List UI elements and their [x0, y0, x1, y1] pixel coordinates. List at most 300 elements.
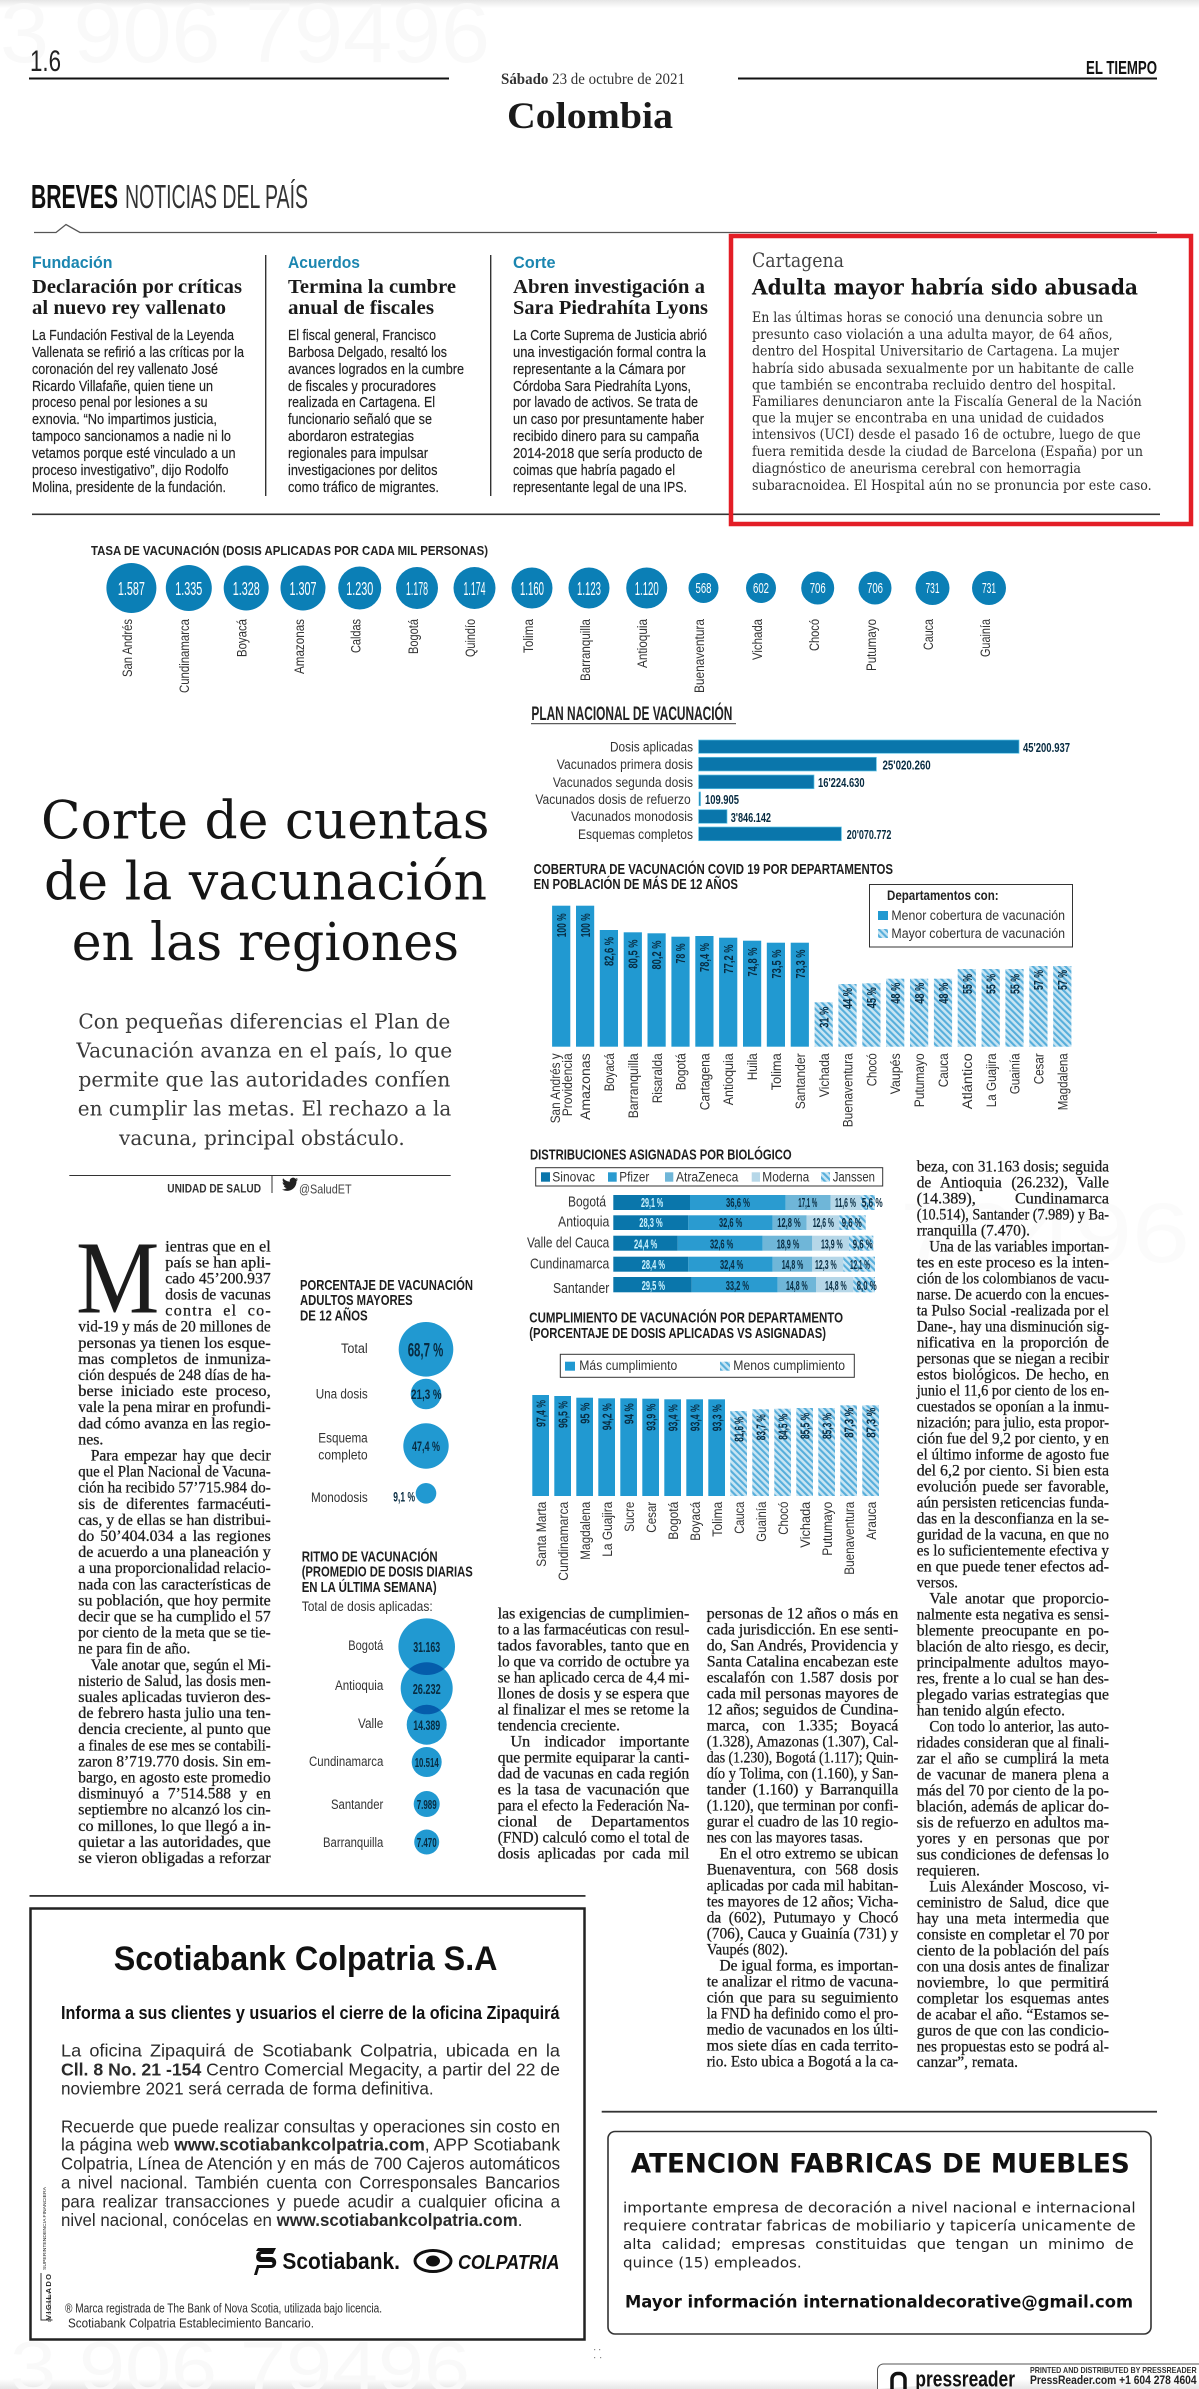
- department labels: Amazonas: [578, 1053, 593, 1120]
- article column 1: do 50’404.034 a las regiones: [78, 1528, 271, 1545]
- vaccination rate bubble row: Boyacá: [234, 619, 250, 657]
- segment values: 9,6 %: [853, 1238, 873, 1252]
- chart: plan nacional de vacunación: 45'200.937: [1023, 741, 1070, 755]
- deck paragraph: Vacunación avanza en el país, lo que: [75, 1039, 452, 1063]
- article column 4: la FND ha definido como el pro-: [707, 2005, 898, 2022]
- breves heading: BREVES: [31, 178, 118, 215]
- bar values: 93,3 %: [710, 1404, 724, 1431]
- article column 4: 12 años; seguidos de Cundina-: [707, 1701, 898, 1718]
- vaccination rate bubble row: Amazonas: [292, 619, 307, 674]
- headline: de la vacunación: [44, 852, 487, 912]
- article column 1: de febrero hasta julio una ten-: [78, 1705, 271, 1722]
- article column 4: (1.328), Amazonas (1.307), Cal-: [707, 1733, 898, 1750]
- department labels: La Guajira: [600, 1501, 615, 1557]
- bar values: 93,9 %: [644, 1404, 658, 1431]
- row labels: Valle del Cauca: [527, 1236, 610, 1252]
- segment values: 5,6 %: [862, 1196, 883, 1210]
- article column 1: Para empezar hay que decir: [91, 1448, 271, 1464]
- department labels: San Andrés y: [548, 1053, 563, 1123]
- chart: plan nacional de vacunación: Esquemas completos: [578, 827, 693, 842]
- department labels: Guainía: [754, 1501, 769, 1542]
- vaccination rate bubble row: Bogotá: [406, 619, 421, 654]
- bar values: 48 %: [937, 983, 951, 1004]
- article column 5: versos.: [917, 1575, 958, 1592]
- vigilado mark: [40, 2187, 53, 2322]
- department labels: Putumayo: [912, 1053, 927, 1107]
- brief: Fundación: [32, 253, 245, 496]
- bar values: 55 %: [1008, 974, 1022, 994]
- article column 1: su población, que hoy permite: [78, 1592, 271, 1609]
- chart: plan nacional de vacunación: 25'020.260: [882, 758, 931, 772]
- chart: plan nacional de vacunación: Vacunados segunda dosis: [553, 775, 693, 790]
- date: Sábado 23 de octubre de 2021: [501, 71, 685, 88]
- article column 4: En el otro extremo se ubican: [720, 1845, 898, 1862]
- brief: Corte: Corte: [513, 253, 556, 272]
- article column 5: del 6,2 por ciento. Si bien esta: [917, 1463, 1109, 1480]
- article column 5: nes propuestas esto se podrá al-: [917, 2039, 1109, 2056]
- ad title: ATENCION FABRICAS DE MUEBLES: [631, 2149, 1130, 2180]
- article column 5: [916, 1159, 1110, 2071]
- segment values: 13,9 %: [821, 1238, 843, 1252]
- row labels: Bogotá: [568, 1195, 607, 1211]
- article column 1: ción después de 248 días de ha-: [78, 1367, 271, 1384]
- vaccination rate bubble row: San Andrés: [120, 619, 135, 677]
- vaccination rate bubble row: [91, 543, 1006, 693]
- bar values: 84,5 %: [776, 1414, 790, 1440]
- vaccination rate bubble row: Quindío: [463, 619, 478, 657]
- article column 5: de acabar el año. “Estamos se-: [917, 2007, 1109, 2024]
- chart: ritmo de vacunación: Antioquia: [335, 1678, 384, 1693]
- article column 1: quietar a las autoridades, que: [78, 1834, 271, 1851]
- highlighted brief: Cartagena: Familiares denunciaron ante la Fiscalía General de la Nación: [752, 394, 1142, 410]
- article column 3: al finalizar el mes se retome la: [498, 1701, 689, 1718]
- brief: Corte: 2014-2018 que sería producto de: [513, 446, 702, 462]
- department labels: Cauca: [936, 1053, 951, 1087]
- chart: porcentaje de vacunación adultos: 21,3 %: [411, 1386, 442, 1402]
- article column 1: vale la pena mirar en profundi-: [78, 1399, 271, 1416]
- article column 5: aún persisten reticencias funda-: [917, 1495, 1109, 1512]
- article column 4: personas de 12 años o más en: [707, 1605, 898, 1622]
- ad title: Scotiabank Colpatria S.A: [114, 1940, 497, 1978]
- article column 4: cada mil personas mayores de: [707, 1685, 898, 1702]
- segment values: 12,3 %: [815, 1258, 837, 1272]
- article column 5: más del 70 por ciento de la po-: [917, 1783, 1109, 1800]
- article column 1: a una proporcionalidad relacio-: [78, 1560, 271, 1577]
- icon: pressreader: [892, 2374, 905, 2389]
- article column 5: nificativa en la proporción de: [917, 1335, 1109, 1352]
- vaccination rate bubble row: Antioquia: [635, 619, 650, 668]
- segment values: 28,4 %: [642, 1258, 665, 1272]
- brief: Fundación: proceso investigativo”, dijo Rodolfo: [32, 463, 229, 479]
- vigilado mark: SUPERINTENDENCIA FINANCIERA: [42, 2187, 47, 2270]
- legend: Mayor cobertura de vacunación: [891, 926, 1065, 941]
- bar values: 57 %: [1032, 970, 1046, 990]
- department labels: Bogotá: [666, 1501, 681, 1540]
- segment values: 24,4 %: [634, 1238, 657, 1252]
- vigilado mark: DE COLOMBIA: [47, 2292, 52, 2322]
- article column 4: tes mayores de 12 años; Vicha-: [707, 1893, 898, 1910]
- bar values: 48 %: [889, 983, 903, 1004]
- article column 4: escalafón con 1.587 dosis por: [707, 1669, 899, 1686]
- department labels: Putumayo: [820, 1502, 835, 1556]
- deck paragraph: vacuna, principal obstáculo.: [118, 1126, 405, 1150]
- chart: porcentaje de vacunación adultos: 9,1 %: [393, 1489, 415, 1505]
- segment values: [634, 1196, 883, 1293]
- row labels: [527, 1195, 610, 1297]
- ad: Atención fábricas de muebles: importante empresa de decoración a nivel nacional e internacional: [623, 2200, 1136, 2216]
- bar values: 80,2 %: [650, 940, 664, 970]
- vaccination rate bubble row: 1.587: [118, 579, 145, 599]
- ad: Scotiabank Colpatria: [30, 1908, 584, 2340]
- segment values: 11,6 %: [835, 1196, 856, 1210]
- deck paragraph: permite que las autoridades confíen: [78, 1068, 450, 1092]
- article column 5: con una dosis antes de finalizar: [917, 1959, 1110, 1976]
- page number: 1.6: [30, 45, 61, 78]
- article column 5: (14.389), Cundinamarca: [917, 1191, 1109, 1208]
- chart: distribuciones por biológico: [527, 1145, 883, 1297]
- article column 3: se han aplicado cerca de 4,4 mi-: [498, 1669, 689, 1686]
- vaccination rate bubble row: 706: [810, 580, 826, 597]
- article column 5: Luis Alexánder Moscoso, vi-: [929, 1879, 1109, 1896]
- department labels: Atlántico: [960, 1053, 975, 1109]
- chart: plan nacional de vacunación: Vacunados monodosis: [571, 809, 693, 824]
- chart: ritmo de vacunación: 26.232: [413, 1681, 441, 1698]
- department labels: Providencia: [560, 1053, 575, 1116]
- department labels: Risaralda: [650, 1053, 665, 1103]
- legend: Departamentos con:: [887, 887, 999, 903]
- bar values: 87,3 %: [842, 1408, 856, 1438]
- brief: Acuerdos: funcionario señaló que se: [288, 412, 432, 428]
- legal note: ® Marca registrada de The Bank of Nova Scotia, utilizada bajo licencia.: [65, 2301, 382, 2316]
- brief: Fundación: exnovia. “No impartimos justicia,: [32, 412, 217, 428]
- ad: Atención fábricas de muebles: Mayor información internationaldecorative@gmail.com: [625, 2292, 1133, 2312]
- bar values: 93,4 %: [666, 1404, 680, 1431]
- chart: ritmo de vacunación: 7.470: [417, 1835, 437, 1850]
- article column 4: te analizar el ritmo de vacuna-: [707, 1973, 898, 1990]
- department labels: Huila: [745, 1053, 760, 1080]
- chart: plan nacional de vacunación: 109.905: [705, 793, 739, 807]
- article column 4: mos siete días en cada territo-: [707, 2037, 898, 2054]
- article column 1: dencia creciente, al punto que: [78, 1721, 271, 1738]
- segment values: 12,1 %: [850, 1258, 870, 1272]
- department labels: Magdalena: [1055, 1053, 1070, 1110]
- department labels: Chocó: [776, 1502, 791, 1535]
- brief: Fundación: Vallenata se refirió a las críticas por la: [32, 345, 245, 361]
- chart heading: PLAN NACIONAL DE VACUNACIÓN: [531, 701, 732, 725]
- department labels: Vaupés: [888, 1053, 903, 1094]
- chart: porcentaje de vacunación adultos: DE 12 AÑOS: [300, 1306, 368, 1324]
- article column 3: es la tasa de vacunación que: [498, 1781, 689, 1798]
- bar values: 73,3 %: [794, 950, 808, 978]
- article column 3: dad de vacunas en cada región: [498, 1765, 689, 1782]
- chart: porcentaje de vacunación adultos: 68,7 %: [408, 1341, 443, 1362]
- article column 4: Buenaventura, con 568 dosis: [707, 1861, 898, 1878]
- highlighted brief: Cartagena: En las últimas horas se conoció una denuncia sobre un: [752, 310, 1103, 326]
- brief: Corte: representante legal de una IPS.: [513, 480, 687, 496]
- article column 5: requieren.: [917, 1863, 980, 1880]
- segment values: 12,8 %: [777, 1216, 801, 1230]
- brief: Corte: coimas que habría pagado el: [513, 463, 675, 479]
- brief: Fundación: Fundación: [32, 253, 112, 272]
- rate heading: TASA DE VACUNACIÓN (DOSIS APLICADAS POR CADA MIL PERSONAS): [91, 543, 488, 558]
- brief: Acuerdos: [288, 253, 464, 496]
- department labels: [548, 1053, 1070, 1127]
- article column 1: a finales de ese mes se contabili-: [78, 1737, 271, 1754]
- article column 4: dío y Tolima, con (1.160), y San-: [707, 1765, 898, 1782]
- bar values: 94,2 %: [600, 1403, 614, 1430]
- bar values: 94 %: [622, 1403, 636, 1424]
- chart: plan nacional de vacunación: 3'846.142: [731, 811, 771, 825]
- article column 5: ción de los colombianos de vacu-: [917, 1271, 1109, 1288]
- bar values: 78 %: [674, 944, 688, 964]
- article column 1: Vale anotar que, según el Mi-: [91, 1657, 271, 1674]
- chart: plan nacional de vacunación: Vacunados primera dosis: [557, 757, 693, 772]
- chart: ritmo de vacunación: Cundinamarca: [309, 1754, 384, 1769]
- bar values: 57 %: [1056, 970, 1070, 990]
- breves heading: NOTICIAS DEL PAÍS: [125, 178, 308, 215]
- article column 4: cada jurisdicción. En ese senti-: [707, 1621, 898, 1638]
- article column 4: nes con las mayores tasas.: [707, 1829, 863, 1846]
- article column 5: res, frente a lo cual se han des-: [917, 1671, 1109, 1688]
- vaccination rate bubble row: 1.335: [175, 579, 202, 599]
- article column 5: nalmente esta negativa es sensi-: [917, 1607, 1109, 1624]
- highlighted brief: Cartagena: que la mujer se encontraba en una unidad de cuidados: [752, 410, 1104, 426]
- article column 1: ción ha recibido 57’715.984 do-: [78, 1480, 271, 1497]
- legend: [870, 884, 1072, 947]
- article column 5: blemente preocupante en po-: [917, 1623, 1109, 1640]
- article column 1: país se han apli-: [165, 1255, 271, 1272]
- department labels: Cauca: [732, 1501, 747, 1534]
- vaccination rate bubble row: 1.160: [520, 579, 544, 599]
- deck paragraph: Con pequeñas diferencias el Plan de: [78, 1009, 450, 1033]
- vaccination rate bubble row: Tolima: [521, 619, 536, 653]
- chart: ritmo de vacunación: [302, 1548, 473, 1854]
- department labels: Santa Marta: [534, 1501, 549, 1567]
- brief: Corte: Córdoba Sara Piedrahíta Lyons,: [513, 379, 691, 395]
- registration marks: [594, 2349, 601, 2358]
- stacked bars: [613, 1195, 875, 1292]
- chart: cobertura por departamentos: [534, 860, 1072, 1127]
- pressreader footer: [878, 2364, 1199, 2389]
- article column 1: nada con las características de: [78, 1576, 271, 1593]
- legend: [536, 1168, 883, 1186]
- article column 5: ción fue del 9,2 por ciento, y en: [917, 1431, 1109, 1448]
- article column 5: guros de que con las condicio-: [917, 2023, 1109, 2040]
- section title: Colombia: [507, 96, 673, 137]
- chart: plan nacional de vacunación: [531, 701, 1070, 842]
- bar values: 48 %: [913, 983, 927, 1004]
- article column 3: las exigencias de cumplimien-: [498, 1605, 689, 1622]
- article column 5: Una de las variables importan-: [929, 1239, 1109, 1256]
- logo: Colpatria: COLPATRIA: [458, 2252, 560, 2274]
- article column 4: tander (1.160) y Barranquilla: [707, 1781, 898, 1798]
- chart: ritmo de vacunación: Total de dosis aplicadas:: [302, 1599, 433, 1614]
- article column 1: decir que se ha cumplido el 57: [78, 1608, 271, 1626]
- vaccination rate bubble row: 706: [867, 580, 883, 597]
- ad: Scotiabank Colpatria: Colpatria, Línea de Atención y en más de 700 Cajeros automáticos: [61, 2153, 560, 2173]
- row labels: Antioquia: [558, 1215, 610, 1231]
- highlighted brief: Cartagena: fuera remitida desde la ciudad de Barcelona (España) por un: [752, 444, 1143, 460]
- article column 5: noviembre, lo que permitirá: [917, 1975, 1109, 1992]
- ad: Scotiabank Colpatria: nivel nacional, conócelas en www.scotiabankcolpatria.com.: [61, 2210, 522, 2230]
- vaccination rate bubble row: 1.178: [406, 579, 428, 599]
- bar values: [534, 1400, 878, 1442]
- article column 1: suales aplicadas tuvieron des-: [78, 1689, 271, 1706]
- article column 1: ne para fin de año.: [78, 1641, 190, 1658]
- highlighted brief: Cartagena: Cartagena: [752, 248, 844, 272]
- article column 1: septiembre no alcanzó los cin-: [78, 1802, 271, 1819]
- article column 5: zar el año se cumplirá la meta: [917, 1751, 1109, 1768]
- chart heading: DISTRIBUCIONES ASIGNADAS POR BIOLÓGICO: [530, 1145, 792, 1163]
- highlighted brief: Cartagena: diagnóstico de aneurisma cerebral con hemorragia: [752, 461, 1081, 477]
- article column 5: completar los esquemas antes: [917, 1991, 1109, 2008]
- department labels: Cesar: [1031, 1053, 1046, 1084]
- byline: UNIDAD DE SALUD: [167, 1184, 261, 1196]
- chart: ritmo de vacunación: Santander: [331, 1797, 384, 1812]
- segment values: 32,4 %: [720, 1258, 743, 1272]
- ad: Atención fábricas de muebles: [608, 2132, 1151, 2334]
- row labels: Cundinamarca: [530, 1256, 610, 1272]
- brief: Acuerdos: El fiscal general, Francisco: [288, 328, 436, 344]
- highlighted brief: Cartagena: presunto caso violación a una adulta mayor, de 64 años,: [752, 327, 1113, 343]
- article column 4: [707, 1605, 899, 2070]
- article column 5: sis de refuerzo en adultos ma-: [917, 1815, 1109, 1832]
- article column 5: guridad de la vacuna, en que no: [917, 1527, 1109, 1544]
- article column 5: ridades consideran que al finali-: [917, 1735, 1109, 1752]
- vaccination rate bubble row: Cauca: [921, 619, 936, 650]
- vaccination rate bubble row: 602: [753, 580, 769, 597]
- bars: [552, 906, 1071, 1047]
- article column 1: zaron 8’719.770 dosis. Sin em-: [78, 1753, 271, 1770]
- article column 3: (FND) calculó como el total de: [498, 1829, 689, 1846]
- department labels: Boyacá: [688, 1501, 703, 1541]
- article column 5: (10.514), Santander (7.989) y Ba-: [917, 1207, 1109, 1224]
- brief: Acuerdos: avances logrados en la cumbre: [288, 362, 464, 378]
- brief: Corte: por lavado de activos. Se trata de: [513, 395, 698, 411]
- brief: Acuerdos: investigaciones por delitos: [288, 463, 438, 479]
- article column 5: consiste en completar el 70 por: [917, 1927, 1110, 1944]
- article column 5: es lo suficientemente efectiva y: [917, 1543, 1109, 1560]
- article column 5: estos biológicos. De hecho, en: [917, 1367, 1109, 1384]
- vaccination rate bubble row: Caldas: [348, 619, 364, 653]
- article column 4: gurar el cuadro de las 10 regio-: [707, 1813, 898, 1830]
- icon: twitter bird: [282, 1178, 298, 1191]
- article column 4: (706), Cauca y Guainía (731) y: [707, 1925, 898, 1942]
- headline: en las regiones: [72, 913, 459, 973]
- legend: AtraZeneca: [676, 1170, 739, 1185]
- chart: cumplimiento de vacunación: [529, 1309, 879, 1581]
- brief: Fundación: proceso penal por lesiones a su: [32, 395, 208, 411]
- article column 1: dosis de vacunas: [165, 1287, 271, 1304]
- article column 1: berse iniciado este proceso,: [78, 1383, 271, 1400]
- chart heading: PORCENTAJE DE VACUNACIÓN: [300, 1276, 473, 1294]
- bar values: 87,3 %: [864, 1408, 878, 1438]
- vaccination rate bubble row: Guainía: [978, 619, 993, 657]
- article column 5: blación de alto riesgo, es decir,: [917, 1639, 1109, 1656]
- department labels: Antioquia: [721, 1053, 736, 1105]
- logo: Colpatria: [415, 2250, 560, 2274]
- article column 5: narse. De acuerdo con la encues-: [917, 1287, 1109, 1304]
- article column 5: rranquilla (7.470).: [917, 1223, 1030, 1240]
- byline: @SaludET: [299, 1182, 352, 1196]
- drop cap: M: [76, 1221, 159, 1336]
- article column 5: tes en este proceso es la inten-: [917, 1255, 1109, 1272]
- vaccination rate bubble row: Chocó: [807, 619, 822, 651]
- legend: Janssen: [833, 1170, 875, 1185]
- article column 1: vid-19 y más de 20 millones de: [78, 1319, 271, 1336]
- article column 5: Dane-, hay una disminución sig-: [917, 1319, 1109, 1336]
- headline: Corte de cuentas: [41, 791, 490, 851]
- brief: Acuerdos: de fiscales y procuradores: [288, 379, 436, 395]
- vaccination rate bubble row: 1.120: [635, 579, 659, 599]
- vaccination rate bubble row: 568: [696, 580, 712, 597]
- brief: Corte: Abren investigación a: [513, 276, 705, 298]
- bar values: 78,4 %: [698, 943, 712, 972]
- vaccination rate bubble row: 1.307: [290, 579, 316, 599]
- brief: Corte: un caso por presuntamente haber: [513, 412, 704, 428]
- bar values: 85,5 %: [798, 1413, 812, 1439]
- department labels: Buenaventura: [842, 1501, 857, 1575]
- department labels: Bogotá: [674, 1053, 688, 1090]
- byline: [69, 1175, 451, 1196]
- article column 1: contra el co-: [165, 1303, 271, 1320]
- chart heading: RITMO DE VACUNACIÓN: [302, 1548, 438, 1566]
- department labels: Arauca: [864, 1501, 879, 1540]
- ad: Scotiabank Colpatria: La oficina Zipaquirá de Scotiabank Colpatria, ubicada en la: [61, 2041, 560, 2061]
- article column 5: personas que se niegan a recibir: [917, 1351, 1110, 1368]
- vaccination rate bubble row: Cundinamarca: [177, 619, 192, 693]
- highlighted brief: Cartagena: Adulta mayor habría sido abusada: [751, 275, 1138, 300]
- article column 5: ceministro de Salud, dice que: [917, 1895, 1109, 1912]
- article column 5: ta Pulso Social -realizada por el: [917, 1303, 1110, 1320]
- department labels: Santander: [793, 1053, 808, 1109]
- article column 1: nes.: [78, 1431, 103, 1448]
- article column 3: que permite equiparar la canti-: [498, 1749, 689, 1766]
- brief: Acuerdos: Termina la cumbre: [288, 276, 456, 298]
- brief: Corte: Sara Piedrahíta Lyons: [513, 297, 708, 319]
- segment values: 29,1 %: [641, 1196, 663, 1210]
- article column 5: nización; para julio, esta propor-: [917, 1415, 1109, 1432]
- ad: Scotiabank Colpatria: Informa a sus clientes y usuarios el cierre de la oficina Zipaquirá: [61, 2003, 560, 2023]
- ad: Atención fábricas de muebles: quince (15) empleados.: [623, 2255, 802, 2271]
- department labels: Barranquilla: [626, 1053, 641, 1118]
- chart: porcentaje de vacunación adultos: Esquema: [318, 1431, 368, 1446]
- article column 5: canzar”, remata.: [917, 2054, 1018, 2071]
- article column 4: rio. Esto ubica a Bogotá a la ca-: [707, 2053, 898, 2070]
- vaccination rate bubble row: 731: [926, 580, 940, 597]
- article column 5: de vacunar de manera plena a: [917, 1767, 1109, 1784]
- vigilado mark: VIGILADO: [44, 2274, 53, 2320]
- article column 5: hay una meta intermedia que: [917, 1911, 1109, 1928]
- ad: Scotiabank Colpatria: Cll. 8 No. 21 -154 Centro Comercial Megacity, a partir del 22 de: [61, 2060, 560, 2080]
- brief: Corte: [513, 253, 708, 496]
- article column 5: plegado varias estrategias que: [917, 1687, 1109, 1704]
- highlighted brief: Cartagena: intensivos (UCI) desde el pasado 16 de octubre, luego de que: [752, 427, 1141, 443]
- department labels: Boyacá: [602, 1053, 617, 1091]
- article column 5: evolución puede ser favorable,: [917, 1479, 1109, 1496]
- vaccination rate bubble row: 1.174: [464, 579, 486, 599]
- segment values: 32,6 %: [719, 1216, 742, 1230]
- article column 5: blación, además de aplicar do-: [917, 1799, 1109, 1816]
- ad: Scotiabank Colpatria: a nivel nacional. También cuenta con Corresponsales Bancarios: [61, 2172, 560, 2192]
- chart: plan nacional de vacunación: 20'070.772: [847, 828, 891, 842]
- vaccination rate bubble row: 1.328: [233, 579, 260, 599]
- article column 1: ientras que en el: [165, 1239, 271, 1256]
- bar values: 55 %: [961, 974, 975, 994]
- ad: Scotiabank Colpatria: noviembre 2021 será cerrada de forma definitiva.: [61, 2078, 434, 2098]
- chart: ritmo de vacunación: 31.163: [413, 1639, 440, 1656]
- article column 1: cado 45’200.937: [165, 1271, 271, 1288]
